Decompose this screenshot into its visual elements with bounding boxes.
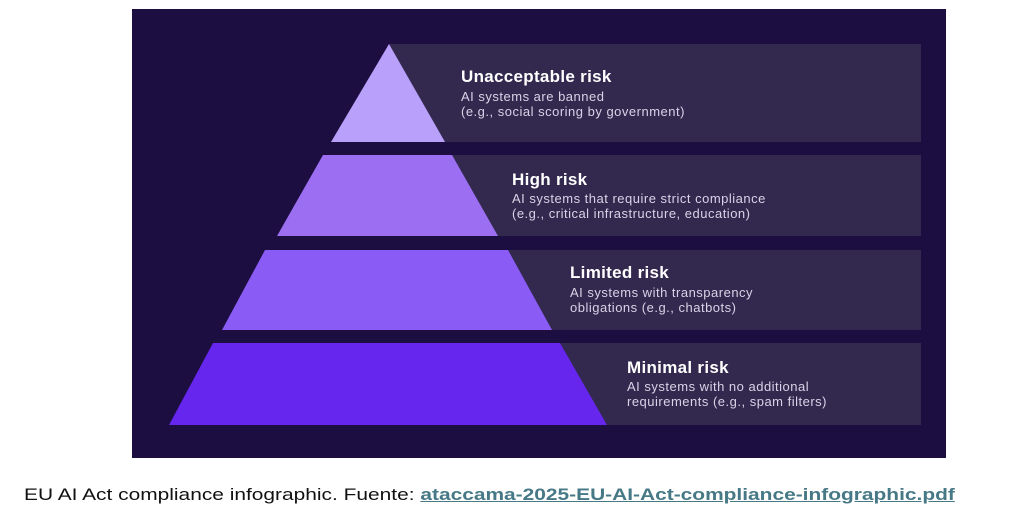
panel: pyramid infographic: AI systems that require strict compliance	[512, 191, 766, 206]
text: limited risk: Limited risk	[570, 263, 669, 282]
panel: pyramid infographic: (e.g., critical infrastructure, education)	[512, 206, 750, 221]
text: minimal risk: Minimal risk	[627, 358, 729, 377]
pyramid tier 3	[222, 250, 552, 330]
panel: pyramid infographic: AI systems are banned	[461, 89, 604, 104]
panel: pyramid infographic	[132, 9, 946, 458]
pyramid tier 1	[331, 44, 445, 142]
panel: pyramid infographic: obligations (e.g., chatbots)	[570, 300, 736, 315]
caption: EU AI Act compliance infographic. Fuente: ataccama-2025-EU-AI-Act-compliance-infographic.pdf	[24, 485, 955, 504]
text: unacceptable risk: Unacceptable risk	[461, 67, 612, 86]
panel: pyramid infographic: AI systems with no additional	[627, 379, 809, 394]
text: high risk: High risk	[512, 170, 587, 189]
panel: pyramid infographic: AI systems with transparency	[570, 285, 753, 300]
panel: pyramid infographic: (e.g., social scoring by government)	[461, 104, 685, 119]
pyramid tier 2	[277, 155, 498, 236]
panel: pyramid infographic: requirements (e.g., spam filters)	[627, 394, 827, 409]
pyramid tier 4	[169, 343, 607, 425]
band backgrounds	[389, 44, 921, 425]
